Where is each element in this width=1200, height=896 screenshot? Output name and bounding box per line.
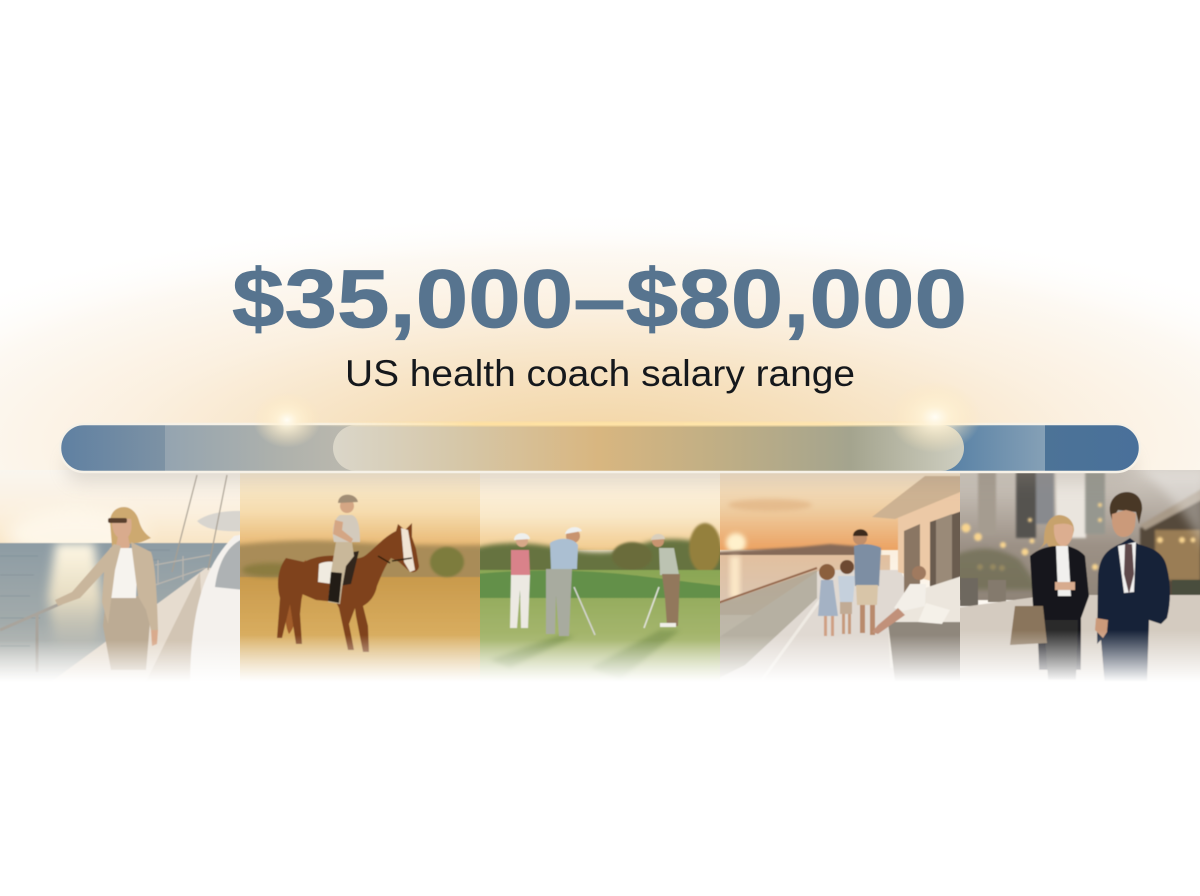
upper middle segment — [942, 425, 1045, 471]
golfer in pink shirt — [510, 533, 530, 628]
lower middle segment — [165, 424, 355, 472]
woman in beige suit — [55, 507, 158, 670]
title: salary range: $35,000–$80,000 — [232, 252, 967, 345]
businesswoman with handbag — [1010, 515, 1089, 680]
seated woman and sofa — [872, 566, 960, 679]
photo: family on waterfront terrace — [720, 474, 960, 679]
bokeh lights — [962, 503, 1196, 571]
salary range bar — [60, 422, 1140, 482]
golfer in blue shirt with club — [546, 527, 595, 636]
high range segment — [1045, 424, 1140, 472]
horse — [277, 523, 419, 652]
rider — [318, 495, 360, 604]
yacht deck and hull — [66, 474, 240, 674]
terrace floor and glass balustrade — [720, 566, 904, 677]
background tree — [430, 547, 464, 577]
sun flare right — [889, 381, 981, 453]
photo: rider on horse in golden field — [240, 473, 480, 678]
photo: business couple in city — [955, 465, 1200, 690]
low range segment — [60, 424, 165, 472]
central highlighted range — [333, 425, 964, 471]
photo: woman on a yacht — [0, 471, 240, 678]
subtitle: US health coach salary range — [345, 353, 855, 394]
family standing — [818, 529, 881, 636]
yacht handrail — [0, 603, 62, 672]
photo: golfers on green — [480, 473, 720, 679]
blurred towers — [977, 473, 1200, 596]
sun flare left — [253, 392, 321, 448]
background warm glow — [0, 210, 1200, 680]
building with roof and windows — [872, 476, 965, 598]
golfer putting — [644, 534, 680, 628]
businessman in navy suit — [1095, 492, 1170, 690]
infographic — [0, 245, 1200, 680]
